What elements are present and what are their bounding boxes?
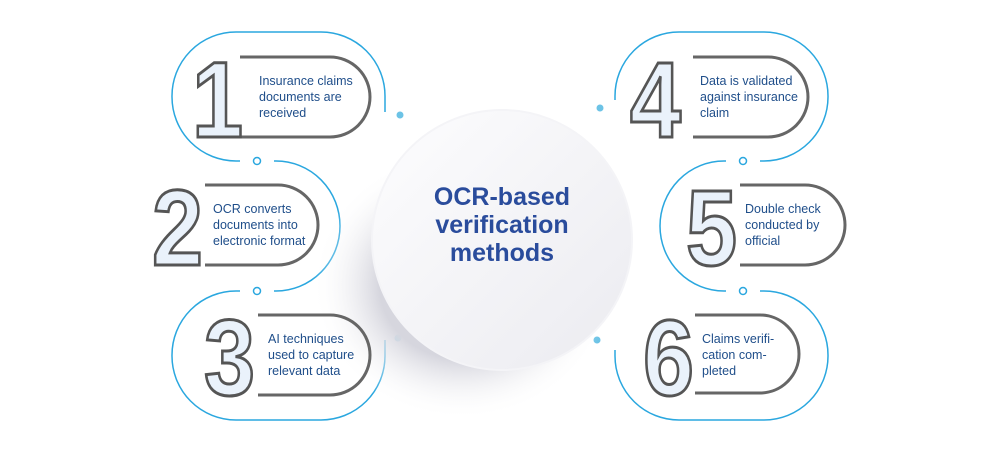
step 5: 5	[686, 168, 737, 289]
step 2: electronic format	[213, 234, 306, 248]
step 5: Double check	[745, 202, 821, 216]
step 3: AI techniques	[268, 332, 344, 346]
step 4	[630, 40, 808, 161]
step 3: 3	[204, 298, 255, 419]
step 2: OCR converts	[213, 202, 292, 216]
central circle: OCR-based	[434, 183, 570, 211]
step 2: documents into	[213, 218, 298, 232]
step 6: pleted	[702, 364, 736, 378]
central circle: verification	[435, 211, 569, 239]
step 4: claim	[700, 106, 729, 120]
step 6: 6	[643, 298, 694, 419]
step 1	[192, 40, 370, 161]
step 6	[643, 298, 799, 419]
step 1: Insurance claims	[259, 74, 353, 88]
step 6: cation com-	[702, 348, 767, 362]
step 4: 4	[630, 40, 681, 161]
step 1: documents are	[259, 90, 342, 104]
step 3	[204, 298, 370, 419]
step 3: relevant data	[268, 364, 340, 378]
step 4: against insurance	[700, 90, 798, 104]
central circle	[312, 110, 632, 420]
step 6: Claims verifi-	[702, 332, 774, 346]
step 3: used to capture	[268, 348, 354, 362]
step 5	[686, 168, 845, 289]
step 1: received	[259, 106, 306, 120]
step 1: 1	[192, 40, 243, 161]
step 2: 2	[152, 168, 203, 289]
step 4: Data is validated	[700, 74, 792, 88]
step 5: official	[745, 234, 780, 248]
central circle: methods	[450, 239, 554, 267]
step 5: conducted by	[745, 218, 820, 232]
step 2	[152, 168, 318, 289]
blue outlines	[172, 32, 828, 420]
